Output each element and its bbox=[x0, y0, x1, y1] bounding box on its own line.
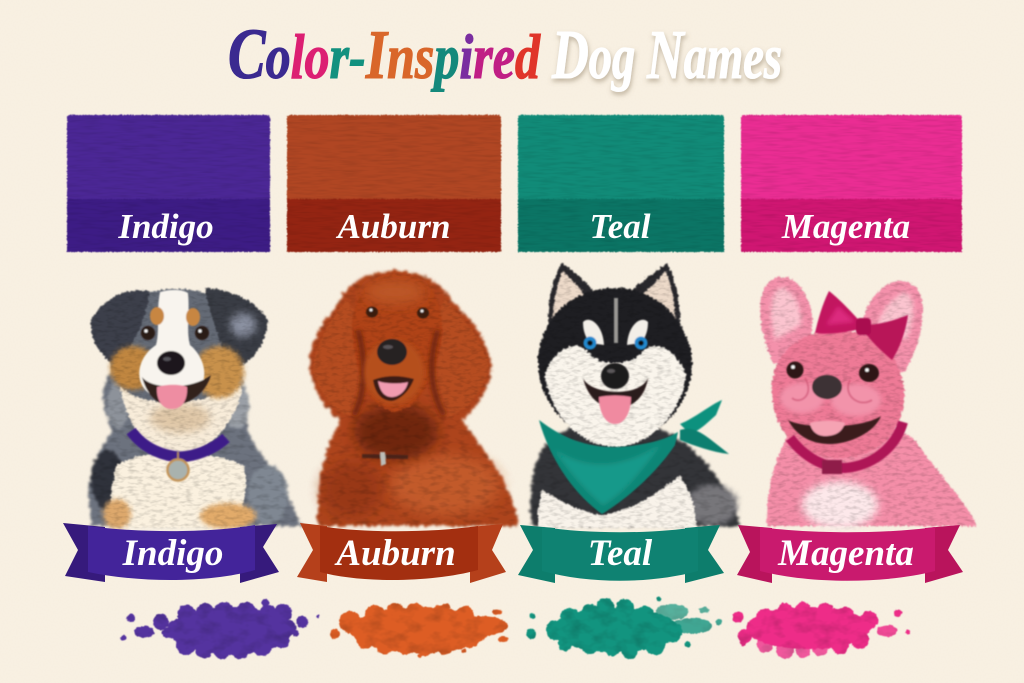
ribbon: Auburn: Auburn bbox=[334, 533, 456, 574]
dog illustration: Irish setter bbox=[310, 271, 518, 526]
title bbox=[228, 14, 782, 94]
title: Dog Names bbox=[551, 17, 782, 94]
ribbon: Indigo: Indigo bbox=[122, 533, 223, 574]
panel: indigo swatch bbox=[67, 115, 270, 252]
panel: magenta swatch: Magenta bbox=[781, 207, 910, 246]
dog illustration: husky with teal bandana bbox=[531, 263, 740, 528]
magenta bow bbox=[815, 291, 908, 360]
panel: teal swatch bbox=[518, 115, 724, 252]
title: Color-Inspired bbox=[228, 14, 541, 94]
ribbon: Magenta bbox=[737, 525, 963, 583]
dog illustration: Australian shepherd bbox=[89, 288, 302, 529]
dog illustration: pink French bulldog bbox=[760, 277, 977, 529]
paint splat: indigo bbox=[120, 599, 320, 659]
paint splat: auburn bbox=[330, 603, 508, 658]
ribbon: Magenta: Magenta bbox=[777, 533, 914, 574]
ribbon: Teal: Teal bbox=[588, 533, 653, 574]
paint splat: teal bbox=[526, 597, 722, 659]
panel: indigo swatch: Indigo bbox=[117, 207, 214, 246]
indigo collar and tag bbox=[131, 431, 226, 480]
panel: magenta swatch bbox=[741, 115, 962, 252]
ribbon: Auburn bbox=[297, 523, 506, 583]
panel: auburn swatch bbox=[287, 115, 501, 252]
panel: teal swatch: Teal bbox=[590, 207, 651, 246]
ribbon: Indigo bbox=[63, 523, 279, 583]
paint splat: magenta bbox=[732, 602, 910, 659]
panel: auburn swatch: Auburn bbox=[336, 207, 450, 246]
teal bandana bbox=[539, 400, 729, 514]
magenta collar bbox=[790, 422, 903, 474]
ribbon: Teal bbox=[518, 525, 724, 583]
